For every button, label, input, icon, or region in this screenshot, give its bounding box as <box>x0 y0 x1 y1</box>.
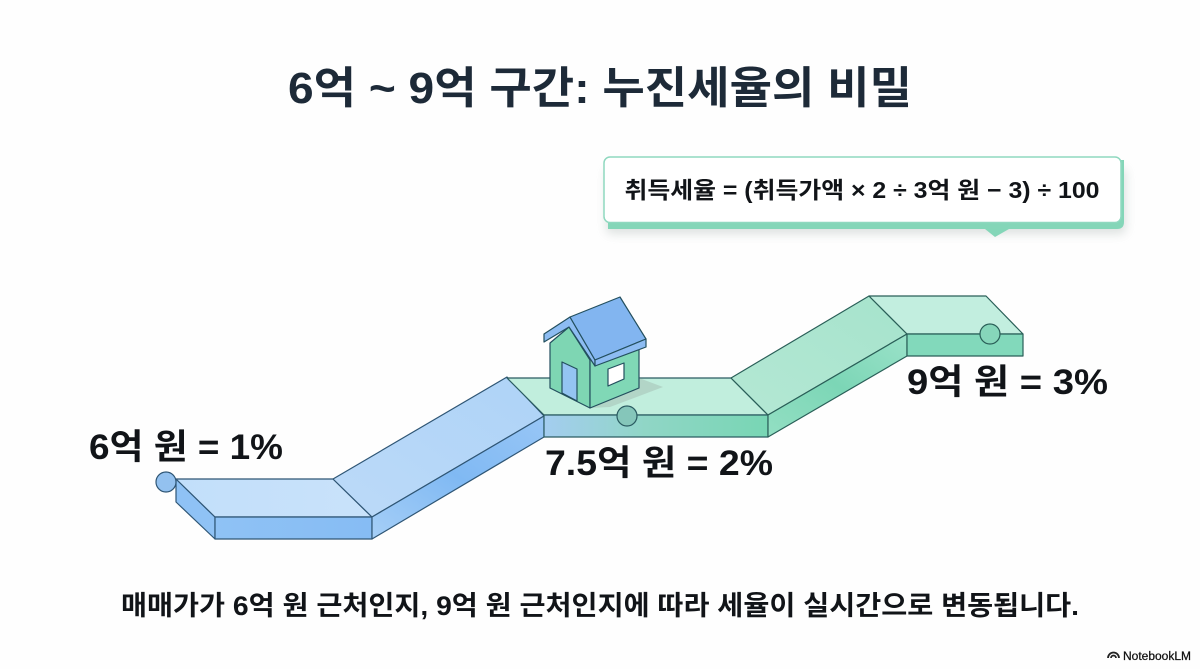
stepped path: middle section <box>507 378 768 437</box>
label: 7.5억 원 = 2%: 7.5억 원 = 2% <box>545 444 773 483</box>
marker: 6억 <box>156 472 176 492</box>
callout: formula: 취득세율 = (취득가액 × 2 ÷ 3억 원 − 3) ÷ 100 <box>624 177 1100 203</box>
caption: 매매가가 6억 원 근처인지, 9억 원 근처인지에 따라 세율이 실시간으로 변동됩니다. <box>121 591 1079 621</box>
stepped path: green high section <box>731 296 1023 437</box>
label: 6억 원 = 1%: 6억 원 = 1% <box>89 428 283 467</box>
stepped path: blue low section <box>176 377 544 539</box>
marker: 9억 <box>980 324 1000 344</box>
label: 9억 원 = 3%: 9억 원 = 3% <box>907 363 1108 402</box>
title: 6억 ~ 9억 구간: 누진세율의 비밀 <box>288 64 912 113</box>
logo: NotebookLM: NotebookLM <box>1123 651 1191 663</box>
icon: house <box>544 297 663 408</box>
callout: formula <box>604 157 1126 237</box>
marker: 7.5억 <box>617 406 637 426</box>
